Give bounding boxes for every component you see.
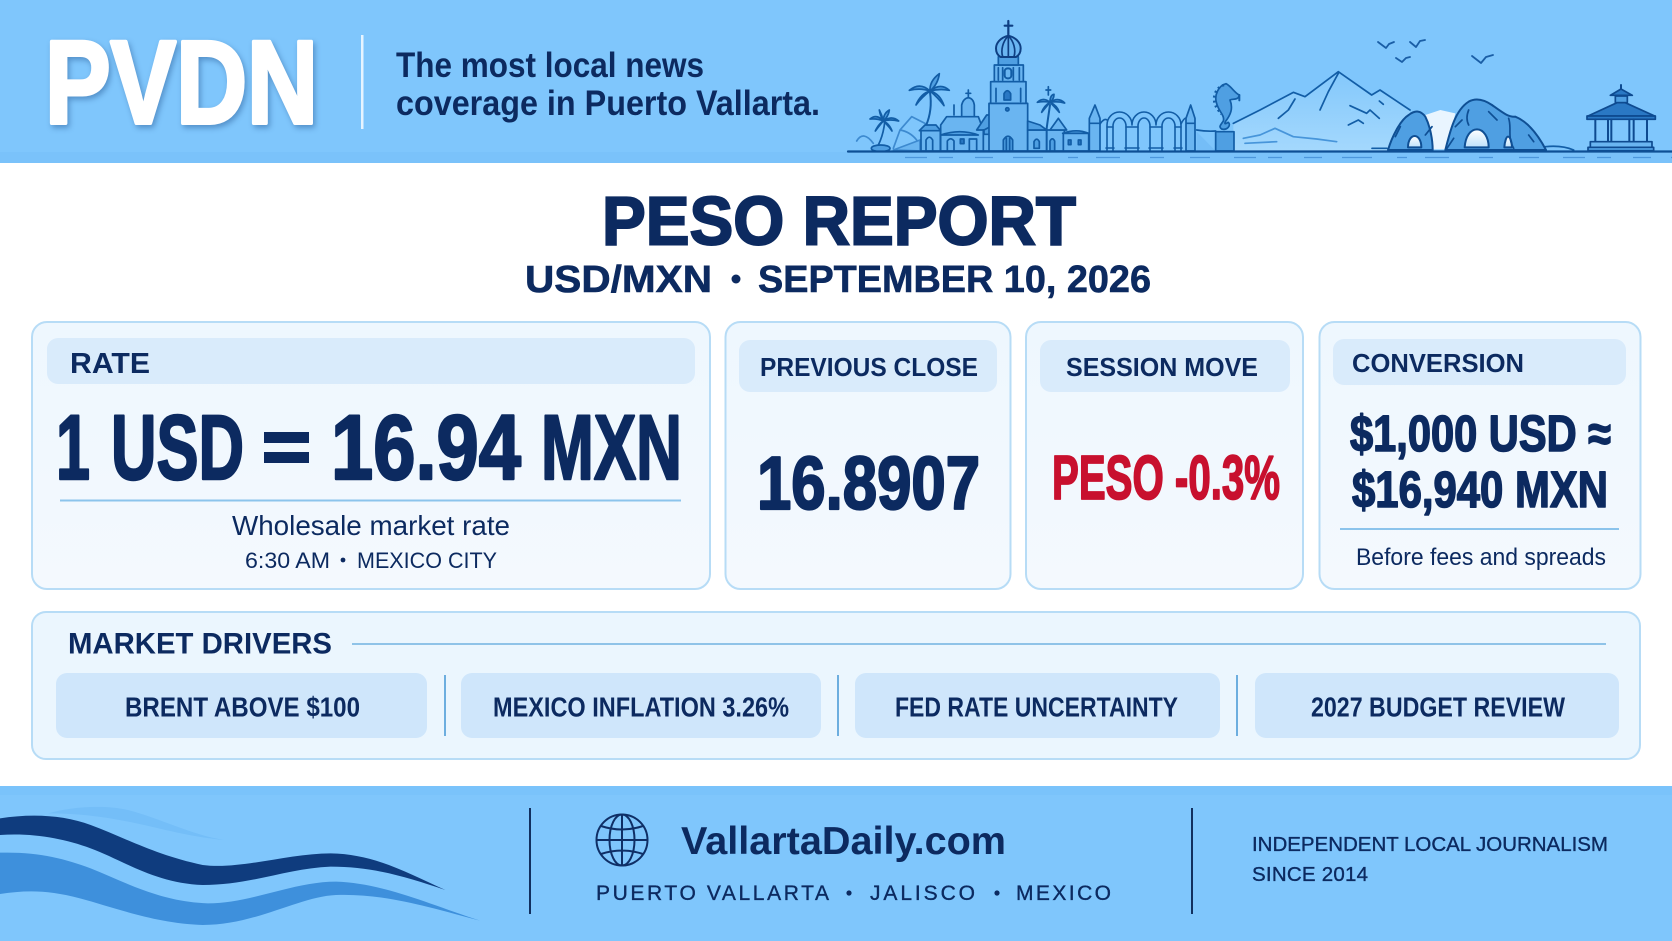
footer statement (1252, 833, 1608, 886)
heading: previous close: PREVIOUS CLOSE (760, 352, 978, 382)
heading: session move: SESSION MOVE (1066, 352, 1258, 382)
driver: inflation (461, 673, 821, 738)
location line (596, 882, 1111, 905)
website name: VallartaDaily.com (681, 820, 1006, 863)
driver: inflation: MEXICO INFLATION 3.26% (493, 692, 789, 722)
birds (1378, 40, 1493, 63)
waves (0, 807, 480, 925)
third palm (1037, 87, 1065, 151)
panel: session move (1026, 322, 1303, 589)
location line: PUERTO VALLARTA (596, 882, 829, 905)
conversion value (1350, 405, 1611, 518)
logo: PVDN: PVDN (45, 17, 318, 149)
low buildings (941, 117, 983, 151)
rate value: MXN (541, 397, 682, 499)
rate value: 1 (56, 397, 90, 499)
note: time and place: 6:30 AM (245, 548, 330, 573)
skyline: rock arches and gazebo (1372, 85, 1655, 151)
seahorse (1214, 84, 1239, 151)
footer banner (0, 786, 1672, 941)
session move value: PESO -0.3% (1052, 444, 1280, 513)
tagline: coverage in Puerto Vallarta. (396, 84, 820, 123)
right buildings (1028, 130, 1064, 151)
skyline: waterline (848, 150, 1672, 153)
header divider (361, 35, 364, 129)
driver: brent (56, 673, 427, 738)
subtitle: pair and date: SEPTEMBER 10, 2026 (758, 259, 1151, 301)
skyline: church and town (857, 21, 1100, 152)
note: wholesale market rate: Wholesale market rate (232, 510, 510, 541)
heading: market drivers: MARKET DRIVERS (68, 628, 332, 660)
driver: brent: BRENT ABOVE $100 (125, 692, 360, 722)
note: before fees: Before fees and spreads (1356, 544, 1606, 571)
rate value: 16.94 (331, 397, 521, 499)
heading: rate: RATE (70, 348, 150, 380)
conversion value: $1,000 USD ≈ (1350, 405, 1611, 462)
note: time and place: MEXICO CITY (357, 548, 497, 573)
panel: conversion (1320, 322, 1640, 589)
tagline: The most local news (396, 46, 704, 85)
rate value (56, 397, 682, 499)
driver: budget (1255, 673, 1619, 738)
footer statement: SINCE 2014 (1252, 863, 1368, 886)
skyline: right tower, seahorse, mountain (1186, 72, 1410, 151)
rate value: USD (111, 397, 244, 499)
conversion value: $16,940 MXN (1352, 461, 1608, 518)
small palm (870, 110, 899, 145)
heading: conversion: CONVERSION (1352, 348, 1524, 378)
arch tower left (1089, 105, 1100, 151)
mountain (1233, 72, 1410, 151)
subtitle: pair and date: USD/MXN (525, 259, 712, 301)
panel: rate (32, 322, 710, 589)
title: PESO REPORT: PESO REPORT (602, 182, 1076, 260)
previous close value: 16.8907 (757, 441, 980, 525)
big palm (909, 74, 949, 126)
gazebo (1587, 85, 1655, 151)
location line: JALISCO (870, 882, 975, 905)
driver: budget: 2027 BUDGET REVIEW (1311, 692, 1565, 722)
illustration: Puerto Vallarta skyline (848, 21, 1672, 158)
subtitle: pair and date (525, 259, 1151, 301)
tagline (396, 46, 820, 123)
footer statement: INDEPENDENT LOCAL JOURNALISM (1252, 833, 1608, 856)
malecon arches (1100, 112, 1186, 151)
church tower (989, 103, 1028, 151)
header banner (0, 0, 1672, 163)
icon: globe (596, 814, 648, 866)
panel: previous close (726, 322, 1010, 589)
panel: market drivers (32, 612, 1640, 759)
driver: fed: FED RATE UNCERTAINTY (895, 692, 1178, 722)
location line: MEXICO (1016, 882, 1111, 905)
note: time and place (245, 548, 497, 573)
driver: fed (855, 673, 1220, 738)
